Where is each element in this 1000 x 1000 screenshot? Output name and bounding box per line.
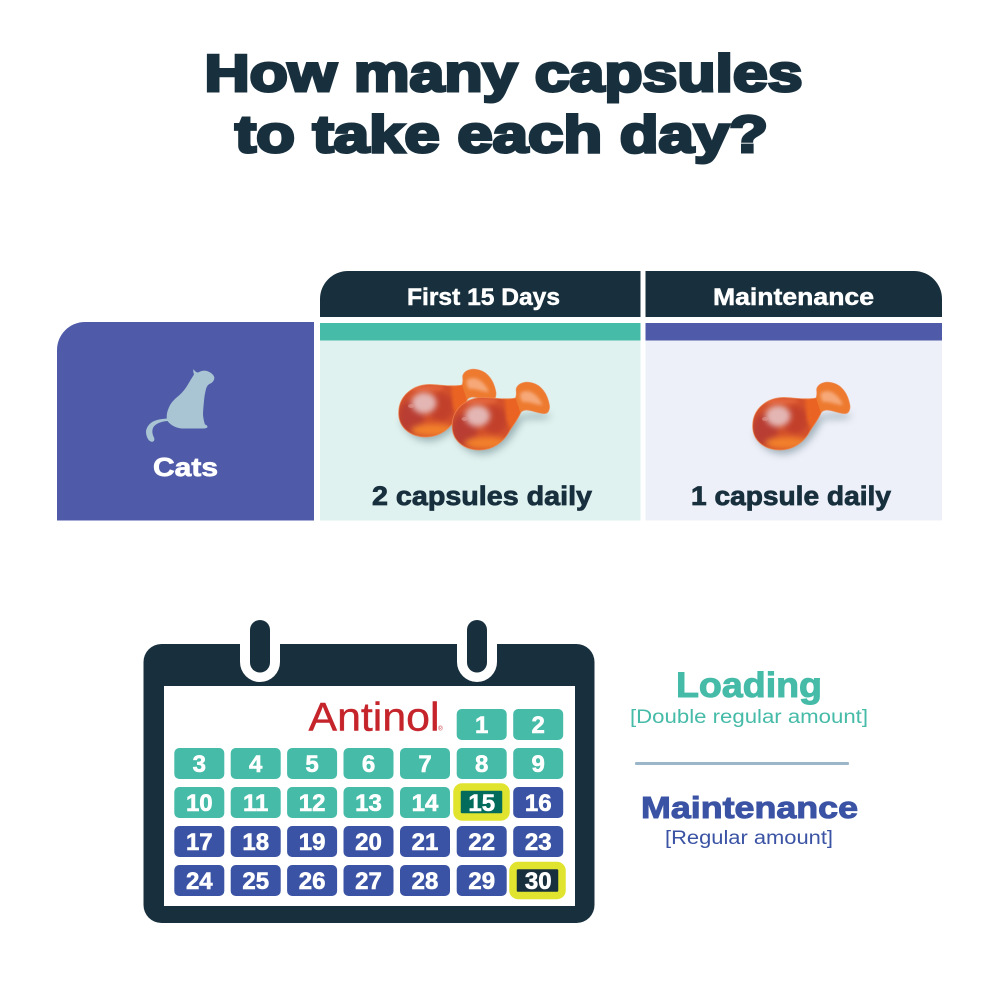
day numbers: 18 [242, 829, 269, 856]
legend: maintenance: Maintenance [641, 790, 858, 825]
label: cats: Cats [153, 452, 218, 482]
logo: Antinol: Antinol [308, 696, 440, 740]
calendar ring: left [240, 620, 280, 682]
day numbers: 22 [468, 829, 495, 856]
legend: maintenance [641, 790, 858, 849]
day numbers: 11 [243, 790, 268, 817]
day numbers: 6 [362, 751, 375, 778]
day numbers: 16 [525, 790, 552, 817]
day numbers: 7 [418, 751, 432, 778]
legend: loading: [Double regular amount] [630, 707, 868, 728]
panel: cats row label [57, 322, 314, 520]
day numbers: 25 [242, 868, 269, 895]
panel: maintenance dose [646, 323, 942, 520]
day numbers: 19 [299, 829, 325, 856]
legend [630, 666, 868, 849]
day numbers: 12 [299, 790, 325, 817]
day numbers: 13 [355, 790, 382, 817]
calendar [144, 620, 594, 923]
day numbers: 2 [532, 712, 545, 739]
panel: first 15 days dose [320, 323, 640, 520]
day numbers: 14 [412, 790, 439, 817]
day numbers: 27 [355, 868, 382, 895]
title: How many capsules [204, 45, 802, 103]
highlighted day 15 [457, 787, 506, 817]
day numbers: 29 [468, 868, 495, 895]
icon: one capsule [752, 382, 852, 454]
panel: dosage table [57, 271, 942, 520]
header: first 15 days: First 15 Days [407, 284, 560, 311]
title [204, 45, 802, 164]
header: maintenance [646, 271, 942, 317]
day numbers: 24 [186, 868, 213, 895]
day numbers: 15 [468, 790, 495, 817]
calendar days [174, 709, 563, 896]
legend: maintenance: [Regular amount] [665, 828, 833, 849]
icon: cat silhouette [146, 369, 214, 442]
legend: loading: Loading [676, 666, 822, 705]
day numbers: 1 [475, 712, 488, 739]
day numbers: 5 [305, 751, 319, 778]
dose text: 2 capsules: 2 capsules daily [372, 481, 592, 511]
calendar frame [144, 644, 594, 923]
highlighted day 30 [513, 866, 562, 896]
day numbers: 20 [355, 829, 382, 856]
logo: Antinol: ® [438, 726, 443, 732]
day numbers: 4 [249, 751, 263, 778]
title: to take each day? [235, 106, 768, 164]
day numbers [186, 712, 552, 895]
infographic [57, 52, 942, 923]
icon: two capsules [398, 369, 552, 454]
dose text: 1 capsule: 1 capsule daily [691, 481, 891, 511]
day numbers: 10 [186, 790, 213, 817]
day numbers: 9 [532, 751, 545, 778]
day numbers: 26 [299, 868, 325, 895]
header: maintenance: Maintenance [713, 284, 874, 311]
header: first 15 days [320, 271, 640, 317]
day numbers: 21 [412, 829, 438, 856]
day numbers: 23 [525, 829, 552, 856]
day numbers: 30 [525, 868, 552, 895]
day numbers: 3 [193, 751, 206, 778]
day numbers: 28 [412, 868, 438, 895]
calendar ring: right [457, 620, 497, 682]
day numbers: 8 [475, 751, 488, 778]
legend: loading [630, 666, 868, 728]
day numbers: 17 [186, 829, 213, 856]
